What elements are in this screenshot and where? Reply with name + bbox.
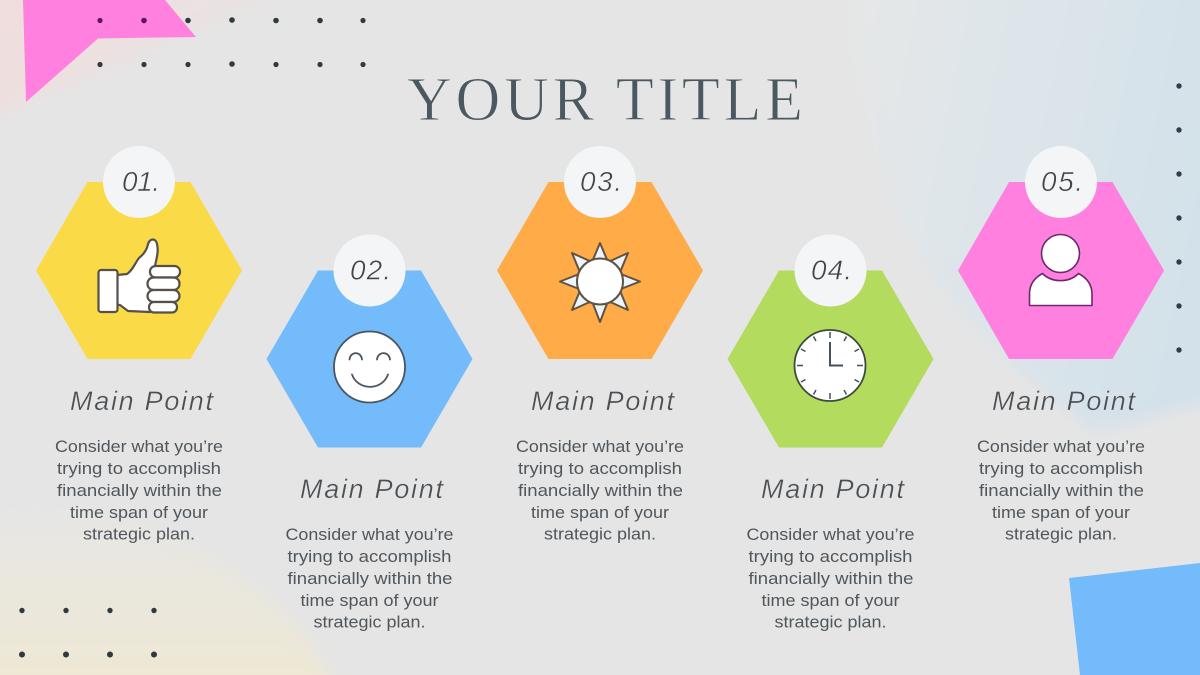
text block 03 <box>516 438 684 544</box>
text block 01 <box>55 438 223 544</box>
hexagon 03 <box>497 182 703 359</box>
text block 04: time span of your <box>762 592 900 610</box>
hexagon 04 <box>728 270 934 448</box>
text block 03: financially within the <box>518 482 683 500</box>
title: YOUR TITLE <box>407 66 803 134</box>
heading 04: Main Point <box>761 474 905 504</box>
icon: clock <box>794 330 866 401</box>
text block 05: Consider what you’re <box>977 438 1145 456</box>
panel: point 01 <box>36 146 242 544</box>
number badge 02: 02. <box>350 254 391 286</box>
text block 01: trying to accomplish <box>57 460 221 478</box>
hexagon 02 <box>266 270 472 448</box>
icon: person <box>1030 234 1092 306</box>
text block 02: financially within the <box>288 570 452 588</box>
text block 02: trying to accomplish <box>288 548 452 566</box>
text block 02: Consider what you’re <box>286 526 454 544</box>
text block 05 <box>977 438 1145 544</box>
text block 03: strategic plan. <box>544 526 656 544</box>
decoration: pink arrow shape <box>23 0 196 102</box>
icon: thumbs up <box>98 240 180 312</box>
number badge 02 <box>334 234 406 306</box>
text block 05: trying to accomplish <box>979 460 1143 478</box>
heading 01: Main Point <box>70 386 214 416</box>
hexagon 05 <box>958 182 1164 359</box>
panel: point 03 <box>497 146 703 544</box>
text block 01: Consider what you’re <box>55 438 223 456</box>
text block 05: time span of your <box>992 504 1131 522</box>
panel: point 02 <box>266 234 472 632</box>
text block 01: strategic plan. <box>83 526 195 544</box>
number badge 01: 01. <box>122 166 160 197</box>
text block 04 <box>746 526 914 632</box>
text block 02: strategic plan. <box>314 614 426 632</box>
number badge 01 <box>103 146 175 218</box>
heading 02: Main Point <box>300 474 444 504</box>
text block 04: Consider what you’re <box>746 526 914 544</box>
icon: sun <box>560 243 640 322</box>
number badge 05: 05. <box>1041 166 1083 197</box>
heading 05: Main Point <box>992 386 1136 416</box>
text block 04: financially within the <box>748 570 914 588</box>
panel: point 05 <box>958 146 1164 544</box>
number badge 04: 04. <box>811 254 852 286</box>
text block 01: time span of your <box>70 504 209 522</box>
decoration: top dot grid <box>97 17 366 67</box>
number badge 04 <box>794 234 866 306</box>
text block 02 <box>286 526 454 632</box>
text block 01: financially within the <box>57 482 222 500</box>
hexagon 01 <box>36 182 242 359</box>
text block 04: strategic plan. <box>774 614 886 632</box>
text block 03: trying to accomplish <box>518 460 682 478</box>
number badge 03: 03. <box>580 166 622 197</box>
decoration: bottom-left dot grid <box>19 608 157 658</box>
text block 05: strategic plan. <box>1005 526 1117 544</box>
text block 03: time span of your <box>531 504 670 522</box>
text block 03: Consider what you’re <box>516 438 684 456</box>
panel: point 04 <box>728 234 934 632</box>
text block 04: trying to accomplish <box>748 548 912 566</box>
heading 03: Main Point <box>531 386 675 416</box>
decoration: blue quadrilateral <box>1069 563 1200 675</box>
decoration: right dot column <box>1176 83 1182 353</box>
text block 02: time span of your <box>300 592 439 610</box>
text block 05: financially within the <box>979 482 1144 500</box>
number badge 05 <box>1025 146 1097 218</box>
icon: smiley face <box>334 332 405 402</box>
number badge 03 <box>564 146 636 218</box>
